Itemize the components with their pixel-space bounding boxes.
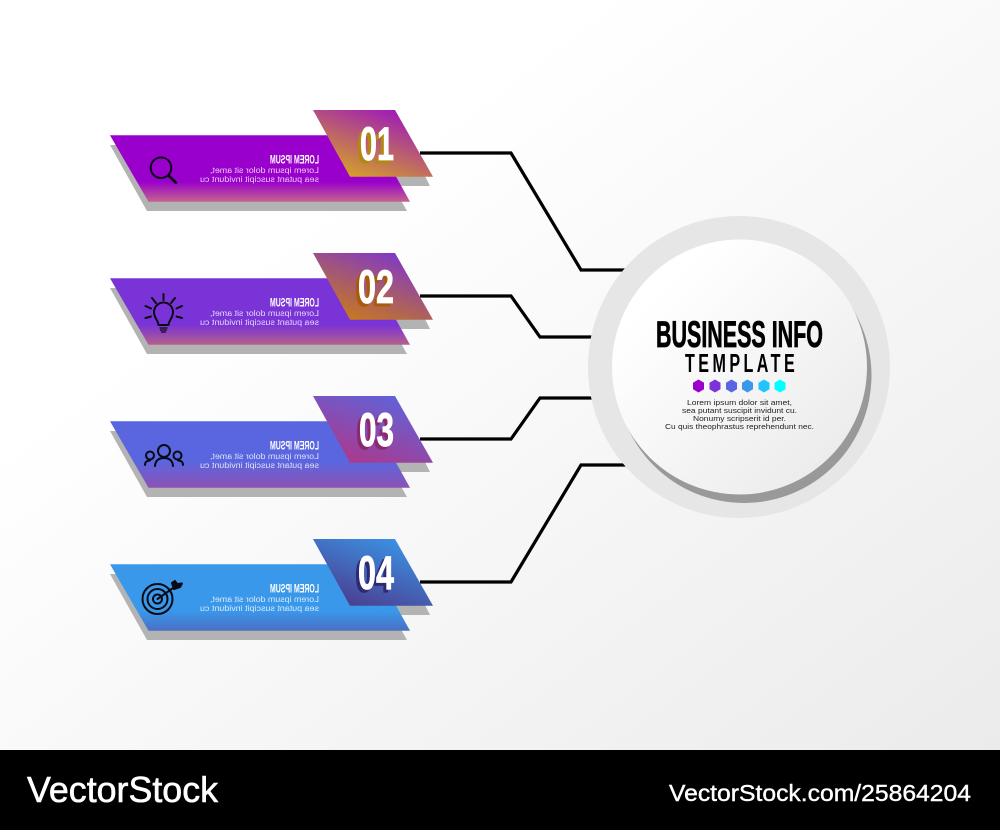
description text: [665, 398, 814, 431]
number 01: 01: [357, 120, 391, 173]
title: BUSINESS INFO: [656, 314, 823, 355]
number 04: 04: [358, 546, 394, 599]
icon: target: [142, 581, 182, 614]
icon: light bulb: [146, 294, 182, 332]
number 02: 02: [355, 263, 391, 316]
mirrored text block: Lorem ipsum dolor sit amet,: [210, 595, 319, 604]
panel: step 02: [110, 253, 433, 354]
panel: central circle: [588, 216, 890, 518]
connector lines: [420, 153, 626, 582]
number 02: 02: [358, 260, 394, 313]
mirrored text block: LOREM IPSUM: [270, 296, 319, 310]
icon: magnifier: [151, 157, 176, 183]
description text: Cu quis theophrastus reprehendunt nec.: [665, 422, 814, 431]
mirrored text block: [200, 438, 319, 470]
panel: step 04: [110, 539, 433, 640]
number 03: [356, 403, 394, 459]
description text: sea putant suscipit invidunt cu.: [682, 406, 797, 415]
mirrored text block: LOREM IPSUM: [270, 582, 319, 596]
number 01: 01: [360, 117, 394, 170]
footer url: VectorStock.com/25864204: [669, 780, 971, 806]
panel: step 01: [110, 110, 433, 211]
mirrored text block: [200, 582, 319, 613]
mirrored text block: sea putant suscipit invidunt cu: [200, 604, 319, 613]
mirrored text block: sea putant suscipit invidunt cu: [200, 318, 319, 327]
number 01: [357, 117, 394, 173]
icon: people: [145, 445, 183, 466]
footer bar: [0, 750, 1000, 830]
hexagon colour row: [693, 380, 786, 392]
number 03: 03: [359, 403, 394, 456]
mirrored text block: Lorem ipsum dolor sit amet,: [210, 309, 319, 318]
mirrored text block: LOREM IPSUM: [270, 438, 319, 452]
mirrored text block: sea putant suscipit invidunt cu: [200, 461, 319, 470]
panel: step 03: [110, 396, 433, 497]
number 03: 03: [356, 406, 391, 459]
mirrored text block: [200, 152, 319, 184]
description text: Nonumy scripserit id per.: [693, 414, 786, 423]
footer logo: VectorStock: [27, 769, 219, 810]
mirrored text block: LOREM IPSUM: [270, 152, 319, 166]
description text: Lorem ipsum dolor sit amet,: [687, 398, 792, 407]
mirrored text block: Lorem ipsum dolor sit amet,: [210, 452, 319, 461]
mirrored text block: sea putant suscipit invidunt cu: [200, 175, 319, 184]
subtitle: TEMPLATE: [685, 348, 795, 378]
number 04: 04: [355, 549, 391, 602]
mirrored text block: Lorem ipsum dolor sit amet,: [210, 166, 319, 175]
mirrored text block: [200, 296, 319, 327]
